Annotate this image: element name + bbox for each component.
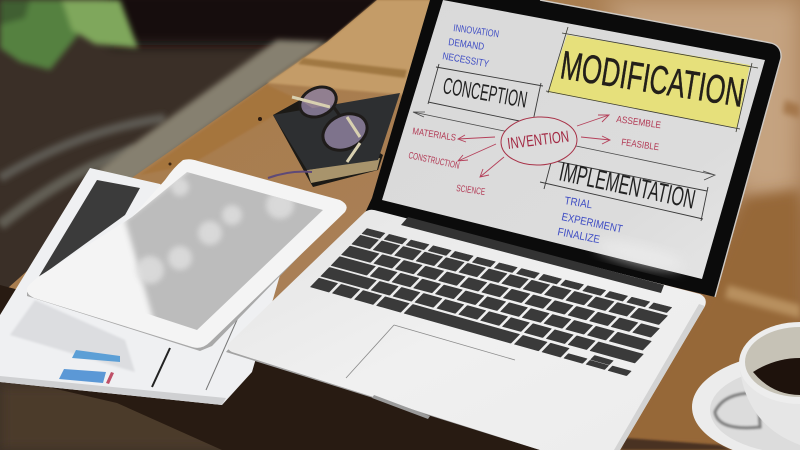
INVENTION ellipse xyxy=(500,115,578,167)
blue word list: conception: NECESSITY xyxy=(441,51,490,70)
glasses xyxy=(292,81,373,162)
red word list: CONSTRUCTION xyxy=(407,150,461,172)
laptop base xyxy=(226,210,706,450)
red word list: SCIENCE xyxy=(456,183,486,198)
yellow MODIFICATION box xyxy=(546,27,758,132)
blue word list: implementation: TRIAL xyxy=(564,195,593,211)
laptop lid xyxy=(365,0,781,297)
notebook xyxy=(268,93,400,187)
red arrows xyxy=(458,115,610,177)
red word list: FEASIBLE xyxy=(621,137,660,153)
blue word list: conception: DEMAND xyxy=(448,37,485,53)
saucer xyxy=(692,362,762,450)
dark table edge xyxy=(0,285,545,450)
coffee cup and saucer xyxy=(692,322,800,450)
tablet screen xyxy=(123,172,323,330)
IMPLEMENTATION box xyxy=(540,155,708,221)
tablet xyxy=(27,159,347,351)
cup handle xyxy=(715,393,760,428)
laptop screen xyxy=(382,0,765,279)
dark picture on paper xyxy=(38,180,140,278)
long double arrow xyxy=(413,112,715,180)
keyboard xyxy=(311,229,671,375)
CONCEPTION box: CONCEPTION xyxy=(441,72,529,113)
coffee xyxy=(753,358,800,395)
blue word list: conception xyxy=(442,24,499,67)
plant leaves xyxy=(0,0,138,70)
blue word list: conception: INNOVATION xyxy=(453,23,500,40)
blue word list: implementation: FINALIZE xyxy=(556,226,601,246)
background: blurred garden and floor xyxy=(0,0,376,450)
INVENTION ellipse: INVENTION xyxy=(506,129,570,153)
IMPLEMENTATION box: IMPLEMENTATION xyxy=(557,157,698,215)
blue word list: implementation xyxy=(558,196,623,244)
cup body xyxy=(742,376,800,444)
red word list: MATERIALS xyxy=(412,126,457,144)
red word list xyxy=(407,114,662,198)
CONCEPTION box xyxy=(428,64,543,126)
red word list: ASSEMBLE xyxy=(616,114,662,131)
papers with charts xyxy=(0,168,280,405)
blue word list: implementation: EXPERIMENT xyxy=(560,211,624,236)
hinge bar xyxy=(401,217,664,293)
blue bar chart xyxy=(59,350,120,384)
trackpad xyxy=(346,325,515,378)
